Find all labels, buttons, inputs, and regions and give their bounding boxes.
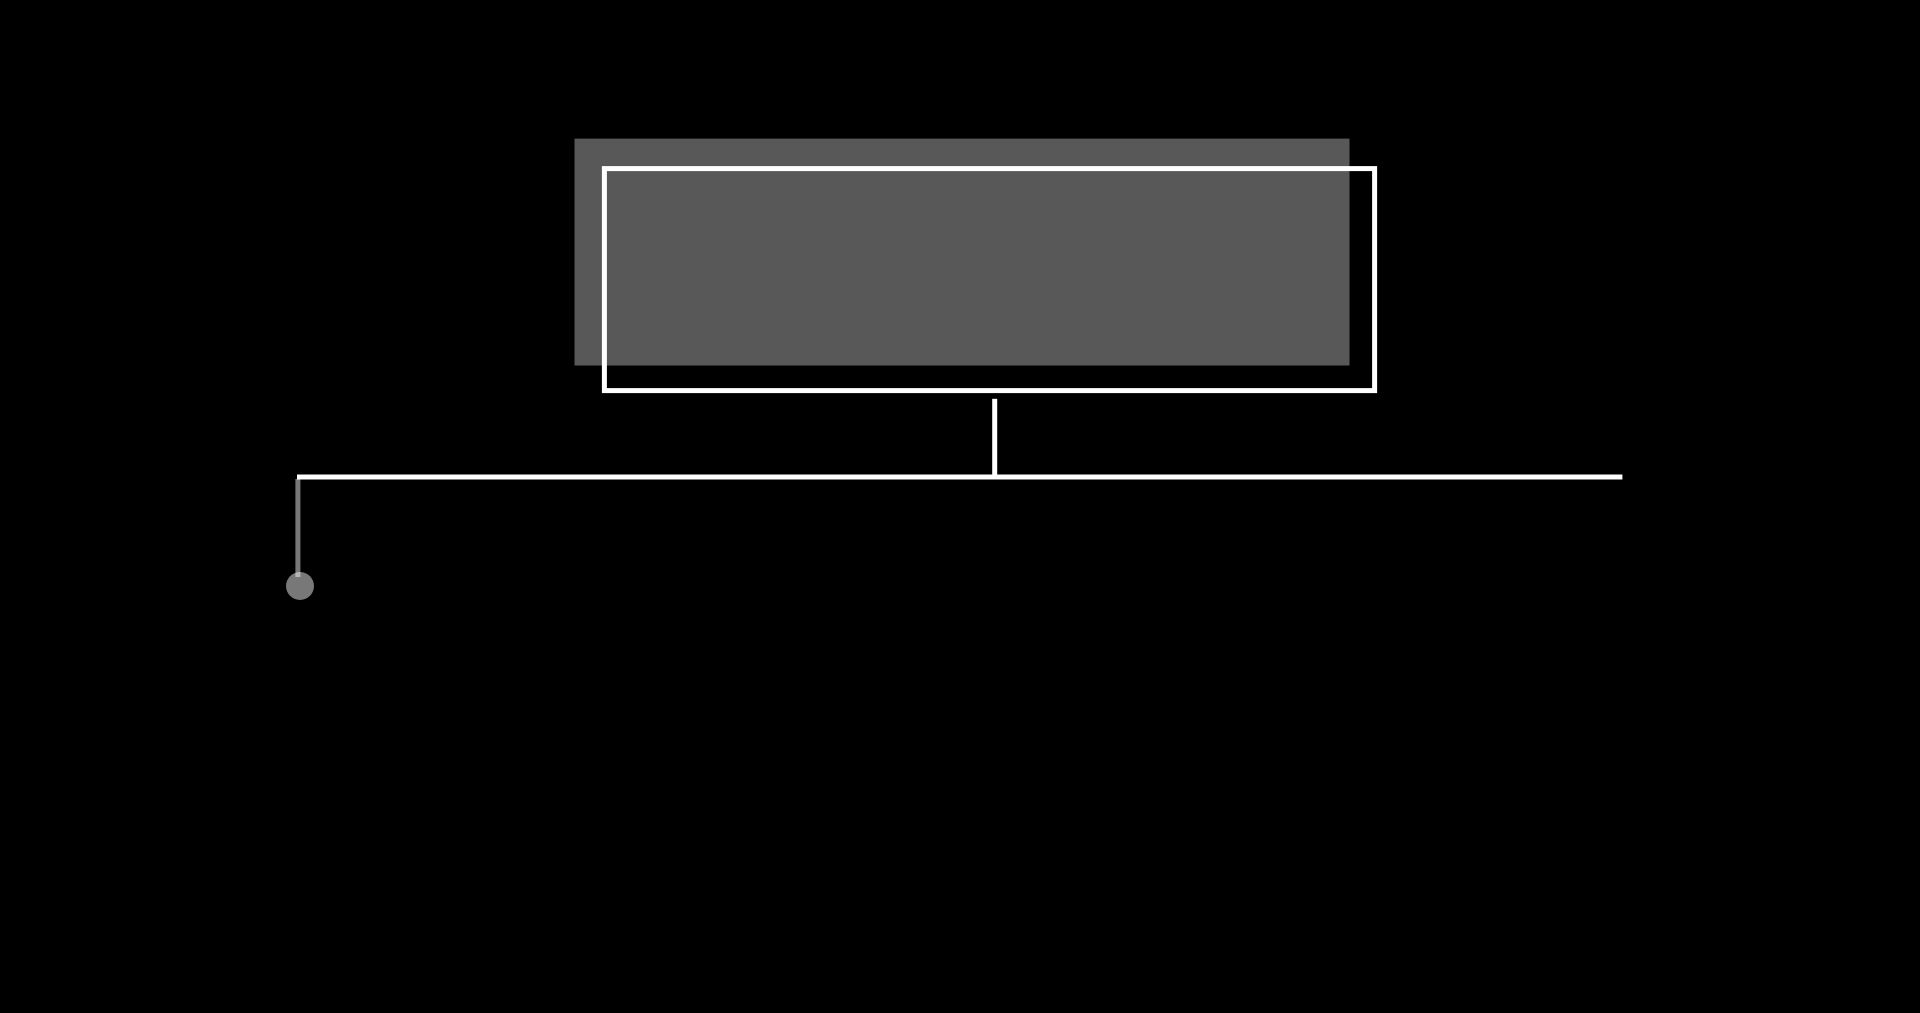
connector: faded drop line to node xyxy=(295,479,300,577)
panel: gray title block xyxy=(574,139,1350,366)
connector: horizontal branch line xyxy=(297,474,1622,480)
panel: white outlined title frame xyxy=(604,169,1375,391)
icon: gray timeline node xyxy=(286,572,314,600)
connector: vertical stem from frame xyxy=(992,399,997,476)
